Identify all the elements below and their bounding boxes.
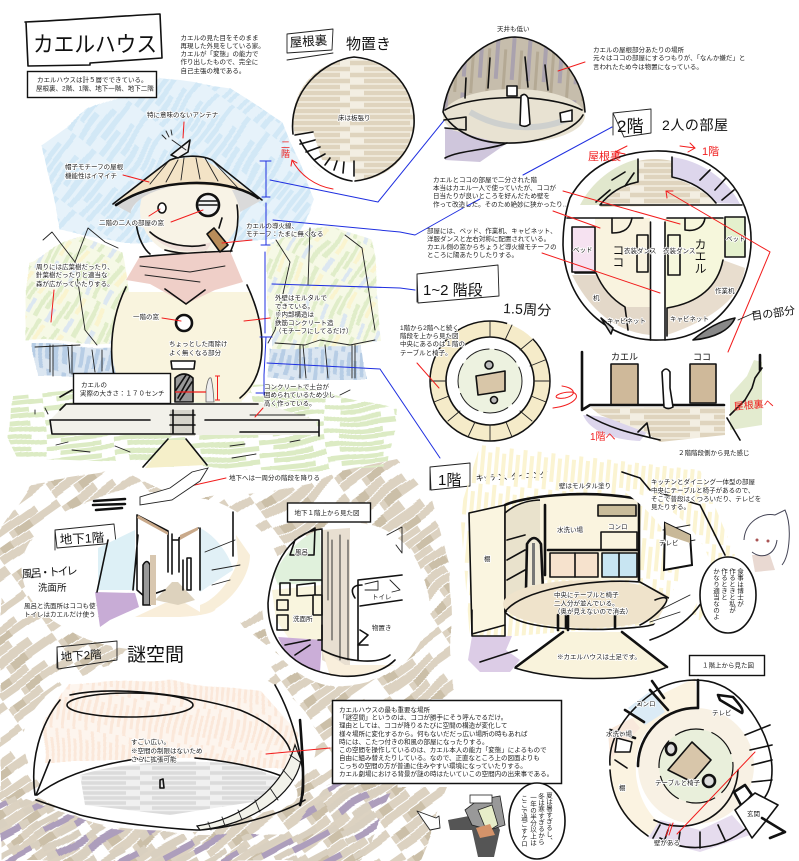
character: kaeru <box>417 795 505 857</box>
second floor plan: キャビネット <box>607 316 646 325</box>
speech bubble: seasons: 冬は寒すぎるから <box>536 792 545 845</box>
summary box <box>28 72 156 98</box>
summary box: カエルハウスは計５層でできている。 <box>37 75 148 84</box>
forest label <box>36 262 114 322</box>
mouth <box>150 232 212 251</box>
attic dome view <box>443 24 585 162</box>
attic description: 元々はココの部屋にするつもりが、「なんか嫌だ」と <box>593 53 745 62</box>
mystery space description box: 自由に組み替えたりしている。なので、正直なところ上の図面よりも <box>339 753 540 762</box>
concrete label <box>255 382 335 417</box>
basement 1 heading: 風呂・トイレ <box>21 565 78 581</box>
antenna label: 特に意味のないアンテナ <box>147 110 218 119</box>
second floor window label: 二階の二人の部屋の窓 <box>99 218 164 227</box>
basement top view label <box>288 503 370 522</box>
speech bubble: seasons <box>509 783 565 859</box>
concrete label: 囲められているため少し <box>264 390 335 399</box>
second floor description 1 <box>433 175 569 208</box>
tiny figure <box>160 779 164 788</box>
scarf <box>126 251 243 304</box>
basement corridor view <box>95 512 250 627</box>
left stair arc <box>580 159 638 205</box>
wall label: できている。 <box>275 302 314 310</box>
second floor plan <box>542 143 770 352</box>
mystery space dome: ※空間の制限はないため <box>131 746 202 755</box>
finger label: よく無くなる部分 <box>169 348 222 357</box>
room names: ココ <box>611 244 625 268</box>
spiral stairs <box>197 745 301 830</box>
first floor perspective scene: 二人分が並んでいる。 <box>554 598 619 608</box>
speech bubble: meals: 食事は博士が <box>736 568 744 607</box>
grass tufts <box>35 390 350 458</box>
antenna label <box>147 110 218 138</box>
mystery space description box: こっちの空間の方が普通に住みやすい環境になっていたりする。 <box>339 761 527 770</box>
background: left forest <box>28 235 135 345</box>
size box: カエルの <box>81 381 107 389</box>
basement 2 heading: 謎空間 <box>127 644 184 666</box>
head <box>140 163 240 257</box>
antenna <box>162 130 190 158</box>
second floor side view: 屋根裏へ <box>733 397 774 413</box>
second floor heading <box>613 109 728 137</box>
second floor plan: ベッド <box>726 235 746 243</box>
mystery space description box: 理由としては、ココが降りるたびに空間の構造が変化して <box>339 720 507 730</box>
background: grass <box>10 385 398 472</box>
basement 1 heading: 洗面所 <box>38 582 67 594</box>
attic top view: 床は板張り <box>338 113 370 122</box>
basement top view <box>268 527 420 678</box>
first floor perspective scene: 水洗い場 <box>557 525 584 534</box>
background: right forest shadows <box>266 345 366 378</box>
mystery space description box: 「謎空間」というのは、ココが勝手にそう呼んでるだけ。 <box>339 712 507 722</box>
left desk band <box>572 275 650 335</box>
dome outline <box>34 685 303 795</box>
first floor top view label: １階上から見た図 <box>702 660 754 670</box>
back wall <box>505 493 639 580</box>
title <box>25 14 162 66</box>
center landing <box>600 159 717 207</box>
speech bubble: seasons: ここで過ごすケロ <box>520 795 528 847</box>
first floor top view: 玄関 <box>747 809 760 818</box>
bed right <box>725 217 745 257</box>
basement 2 heading <box>57 641 184 669</box>
first floor description <box>651 477 761 511</box>
intro text: 自己主張の塊である。 <box>180 66 245 75</box>
second floor description 1: カエルとココの部屋で二分された階 <box>433 175 538 184</box>
second floor plan: 作業机 <box>715 286 735 295</box>
pointer lines <box>542 191 770 352</box>
attic boxes <box>507 86 572 122</box>
forest label: 周りには広葉樹だったり、 <box>36 262 114 271</box>
roof hat <box>113 156 262 204</box>
stairs description: 階段を上から見た図 <box>400 331 458 340</box>
finger label: ちょっとした雨除け <box>169 339 228 348</box>
first floor description: キッチンとダイニング一体型の部屋 <box>651 477 756 486</box>
first floor perspective scene: 壁はモルタル塗り <box>559 481 611 490</box>
plan arrows: 屋根裏 <box>588 150 621 163</box>
second floor heading: 2階 <box>617 117 643 136</box>
speech bubble: meals: かなり適当なのよ <box>712 568 720 620</box>
first floor top view: 棚 <box>619 783 626 792</box>
main house exterior <box>35 130 350 468</box>
second floor window label <box>99 209 203 227</box>
wall label: 外壁はモルタルで <box>275 293 328 302</box>
basement stair label: 地下へは一周分の階段を降りる <box>229 473 320 482</box>
second floor heading: 2人の部屋 <box>662 117 728 133</box>
stairs direction arrow: 二階 <box>280 140 290 159</box>
sink counter <box>548 550 637 577</box>
exterior callouts <box>36 110 352 417</box>
background: brown hatch of the underground <box>0 462 456 861</box>
forest label: 針葉樹だったりと適当な <box>36 270 108 279</box>
path to the door <box>143 439 207 468</box>
body <box>112 285 262 402</box>
mystery space description box: カエル劇場における背景が謎の時はたいていこの空間内の出来事である。 <box>339 769 553 778</box>
first floor top view: テーブルと椅子 <box>655 778 701 787</box>
right desk band <box>667 260 745 335</box>
first floor top view <box>606 678 785 852</box>
first floor top view: 水洗い場 <box>606 729 632 738</box>
plan arrows: 1階 <box>702 145 719 158</box>
wall label: ※内部構造は <box>275 310 314 318</box>
concrete label: コンクリートで土台が <box>264 382 330 391</box>
floor <box>37 758 298 831</box>
first floor top view: 壁がある <box>654 838 680 847</box>
second floor description 2: 部屋には、ベッド、作業机、キャビネット、 <box>427 226 557 235</box>
first floor heading: キッチン、ダイニング <box>476 469 548 483</box>
first floor heading <box>430 463 548 490</box>
second floor description 2 <box>427 226 557 259</box>
mystery space description box: 様々場所に変化するから。何もないだだっ広い場所の時もあれば <box>339 729 528 738</box>
second floor description 2: 洋服ダンスと左右対称に配置されている。 <box>427 234 550 243</box>
basement top view: トイレ <box>372 594 392 601</box>
basement 1 heading: 地下1階 <box>59 531 105 547</box>
speech bubble: seasons: 夏は暑すぎるし、 <box>544 792 553 844</box>
basement note: トイレはカエルだけ使う！ <box>24 610 102 618</box>
basement 2 heading: 地下2階 <box>60 648 103 664</box>
hat roof label <box>65 162 149 182</box>
second floor description 2: ところに陽あたりしたりする。 <box>427 250 518 259</box>
first floor top view: コンロ <box>636 700 656 708</box>
first floor description: 中央にテーブルと椅子があるので、 <box>651 486 754 494</box>
bed left <box>572 227 595 273</box>
speech bubble: meals: 作るときと私が <box>728 567 736 614</box>
stairs heading: 1~2 階段 <box>423 282 483 299</box>
wall label: 鉄筋コンクリート造 <box>275 318 334 327</box>
attic description <box>558 45 745 71</box>
intro text: 作り出したもので、完全に <box>180 57 258 66</box>
attic description: カエルの屋根部分あたりの場所 <box>593 45 684 54</box>
kaeru room <box>665 218 724 308</box>
stairs top view <box>430 321 550 441</box>
concrete label: 高く作っている。 <box>264 398 316 408</box>
first floor heading: 1階 <box>438 472 461 489</box>
trees left <box>35 228 118 376</box>
attic top view <box>280 57 415 189</box>
attic dome view: 天井も低い <box>497 24 530 33</box>
base platform <box>50 390 319 436</box>
first floor perspective scene: 棚 <box>484 554 491 563</box>
blue level brackets and connector lines <box>256 97 612 458</box>
right stair arc <box>672 157 740 204</box>
background: sky hatch <box>42 78 315 240</box>
wall label: （モチーフにしてるだけ） <box>275 327 352 335</box>
second floor side view: 1階へ <box>590 431 616 443</box>
mystery space description box <box>332 700 562 784</box>
second floor plan: 衣装ダンス <box>624 246 656 255</box>
first floor perspective scene: ※カエルハウスは土足です。 <box>557 652 641 661</box>
intro text: カエルの見た目をそのまま <box>180 34 258 42</box>
nose cigar <box>207 218 228 252</box>
attic section heading: 屋根裏 <box>289 33 328 50</box>
side view caption: ２階階段側から見た感じ <box>678 448 750 457</box>
second floor plan: キャビネット <box>670 314 709 323</box>
second floor plan: 衣装ダンス <box>663 246 695 255</box>
cabinet wall <box>469 505 505 634</box>
grey pillar capsule <box>526 538 543 598</box>
intro text: カエルが「変態」の能力で <box>180 49 259 58</box>
background: right forest <box>268 225 385 350</box>
size box <box>74 374 220 404</box>
lower ground <box>515 632 667 678</box>
stairs description <box>400 323 465 388</box>
room names <box>611 238 707 274</box>
mystery space dome: すごい広い。 <box>131 737 170 746</box>
right stairs <box>622 472 725 650</box>
intro text <box>180 34 265 75</box>
stairs heading <box>417 265 552 319</box>
attic section heading: 物置き <box>346 36 391 53</box>
second floor description 1: 本当はカエル一人で使っていたが、ココが <box>433 183 557 192</box>
stairs heading: 1.5周分 <box>503 300 552 319</box>
basement note: 風呂と洗面所はココも使う。 <box>24 601 108 610</box>
first floor window label: 一階の窓 <box>133 312 160 321</box>
plan arrows <box>588 143 719 163</box>
first floor perspective scene: 中央にテーブルと椅子 <box>554 590 619 599</box>
ceiling opening <box>67 693 193 717</box>
hat roof label: 機能性はイマイチ <box>65 171 117 180</box>
fuse label: カエルの導火線、 <box>246 221 298 230</box>
basement 1 heading <box>21 524 116 618</box>
basement note <box>24 601 108 618</box>
size figure <box>206 378 214 402</box>
first floor window label <box>133 312 181 321</box>
fuse label <box>222 221 323 243</box>
title: カエルハウス <box>33 32 157 57</box>
first floor perspective scene: コンロ <box>608 523 628 531</box>
second floor plan: 机 <box>593 293 600 302</box>
basement top view label: 地下１階上から見た図 <box>294 508 360 517</box>
mystery space dome <box>34 678 330 831</box>
purple corner <box>468 636 520 672</box>
second floor description 1: 作って改造した。そのため絶妙に狭かったり… <box>433 200 569 208</box>
first floor perspective scene: テレビ <box>659 538 678 547</box>
forest label: 森が広がっていたりする。 <box>36 279 114 288</box>
first floor window <box>176 315 192 331</box>
first floor top view: テレビ <box>712 708 732 717</box>
intro text: 再現した外見をしている家。 <box>180 41 265 50</box>
door <box>175 374 193 402</box>
second floor side view <box>582 352 774 457</box>
basement stair label <box>93 468 320 510</box>
attic section heading <box>287 29 391 60</box>
stairs description: 中央にあるのは１階の <box>400 339 465 348</box>
red spiral between views <box>553 386 576 408</box>
summary box: 屋根裏、2階、1階、地下一階、地下二階 <box>36 84 154 92</box>
finger label <box>169 339 228 357</box>
hat roof label: 帽子モチーフの屋根 <box>65 162 124 171</box>
speech bubble: seasons: 一年の半分以上は <box>528 794 537 846</box>
mystery space description box: 時には、こたつ付きの和風の部屋になったりする。 <box>339 737 488 746</box>
background: left forest shadows <box>36 345 118 376</box>
mystery space description box: カエルハウスの最も重要な場所 <box>339 705 430 714</box>
second floor side view: ココ <box>693 352 711 362</box>
attic description: 言われたため今は物置になっている。 <box>593 62 703 71</box>
awning <box>171 361 195 369</box>
basement top view: 物置き <box>372 623 392 632</box>
trees right <box>268 228 375 378</box>
shelves <box>505 500 542 612</box>
first floor description: そこで普段はくつろいだり、テレビを <box>651 494 761 503</box>
second floor description 1: 日当たりが良いところを好んだため壁を <box>433 191 550 200</box>
stove counter <box>601 532 637 577</box>
round window <box>197 194 219 216</box>
first floor top view label <box>690 656 764 676</box>
mirror pillar <box>143 555 156 605</box>
first floor description: 見たりする。 <box>651 503 690 511</box>
mystery space dome: さらに拡張可能 <box>131 754 177 764</box>
wall label <box>244 293 352 335</box>
fuse label: モチーフ：たまに無くなる <box>246 229 323 238</box>
small window <box>158 203 166 213</box>
speech bubble: meals: 作るときと <box>720 567 728 601</box>
coco room <box>595 218 650 310</box>
character: scientist <box>744 505 790 572</box>
second floor plan: ベッド <box>573 246 592 254</box>
stairs description: テーブルと椅子。 <box>400 348 452 357</box>
first floor perspective scene <box>460 445 735 678</box>
room names: カエル <box>693 238 707 274</box>
basement top view: 洗面所 <box>293 614 313 623</box>
window label: 目の部分 <box>751 304 796 323</box>
entrance steps <box>170 410 195 436</box>
mystery space description box: この空間を操作しているのは、カエル本人の能力「変態」によるもので <box>339 745 547 754</box>
first floor perspective scene: （奥が見えないので消去） <box>554 606 632 616</box>
stairs description: 1階から2階へと続く <box>400 323 459 332</box>
size box: 実際の大きさ：１７０センチ <box>80 388 164 398</box>
second floor description 2: カエル側の窓からちょうど導火線モチーフの <box>427 242 557 251</box>
speech bubble: meals <box>700 557 756 633</box>
basement top view: 風呂 <box>295 548 308 556</box>
second floor side view: カエル <box>611 352 638 362</box>
floor <box>503 580 673 628</box>
stair descent <box>93 468 208 510</box>
television wall <box>664 523 692 570</box>
